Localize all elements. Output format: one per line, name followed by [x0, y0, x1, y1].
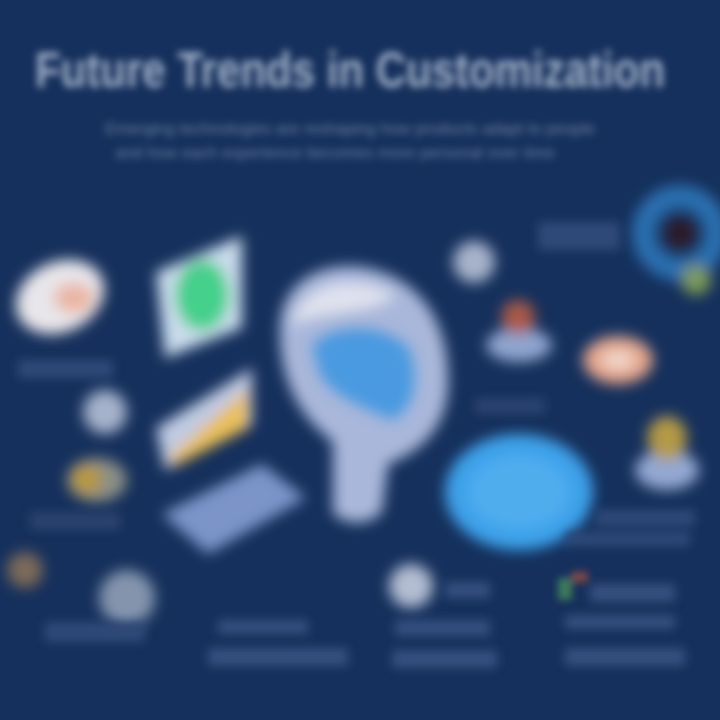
- label: coin: [30, 512, 120, 530]
- subtitle: and how each experience becomes more personal over time: [115, 145, 555, 162]
- label: cloud: [18, 360, 113, 378]
- icon: person yellow: [635, 416, 699, 490]
- subtitle: Emerging technologies are reshaping how products adapt to people: [105, 121, 595, 138]
- label: ring: [538, 222, 620, 250]
- icon: gold coin: [67, 458, 127, 502]
- icon: grey circle bottom centre: [389, 564, 433, 608]
- icon: person red: [486, 300, 552, 362]
- central head: blue cloud: [312, 328, 414, 420]
- icon: green phone card: [156, 236, 242, 358]
- icon: blue ring top right: [632, 185, 720, 295]
- central head: outline: [280, 266, 448, 523]
- icon: multicolour glyph: [558, 572, 588, 600]
- label: bottom centre: [392, 582, 497, 668]
- label: right middle: [565, 510, 695, 546]
- icon: orange dot: [7, 552, 43, 588]
- label: bottom right: [565, 584, 685, 666]
- icon: small grey node: [453, 241, 495, 283]
- icon: yellow chart card: [156, 368, 252, 470]
- icon: blue disc: [445, 434, 593, 550]
- label: centre right: [475, 398, 545, 414]
- label: bottom centre-left: [208, 620, 348, 666]
- label: bottom left: [45, 622, 145, 642]
- subtitle: [105, 121, 595, 162]
- icon: cloud top left: [4, 246, 116, 348]
- icon: keyboard panel: [162, 464, 306, 554]
- icon: small grey circle left: [83, 390, 127, 434]
- icon: grey circle bottom left: [99, 570, 155, 626]
- icon: peach device: [583, 336, 653, 384]
